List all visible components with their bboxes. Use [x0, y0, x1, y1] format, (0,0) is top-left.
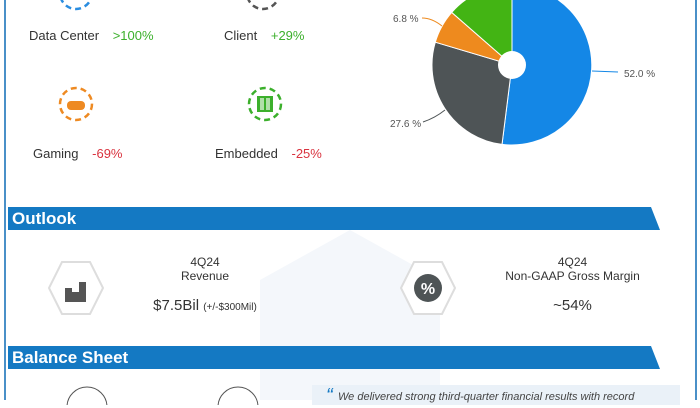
heading: outlook	[8, 207, 660, 230]
label: client: Client +29%	[224, 28, 304, 43]
text: gross margin: 4Q24	[558, 255, 587, 269]
icon: percent hexagon	[400, 261, 456, 315]
heading: balance sheet: Balance Sheet	[12, 348, 128, 367]
label: data center: Data Center >100%	[29, 28, 154, 43]
icon: data center	[60, 0, 90, 10]
heading: outlook: Outlook	[12, 209, 76, 228]
text: revenue	[153, 255, 257, 314]
label: embedded: Embedded -25%	[215, 146, 322, 161]
pie chart	[390, 0, 655, 144]
icon: embedded	[248, 86, 282, 122]
quote box	[312, 385, 680, 405]
pie chart: 27.6 %	[390, 119, 421, 130]
text: gross margin: Non-GAAP Gross Margin	[505, 269, 640, 283]
text: gross margin	[505, 255, 640, 314]
icon: percent hexagon: %	[421, 281, 435, 298]
text: gross margin: ~54%	[553, 297, 592, 314]
text: revenue: 4Q24	[190, 255, 220, 269]
pie chart: 6.8 %	[393, 14, 419, 25]
quote box: “	[326, 385, 333, 407]
label: gaming: Gaming -69%	[33, 146, 122, 161]
pie chart: 52.0 %	[624, 69, 655, 80]
text: revenue: Revenue	[181, 269, 229, 283]
heading: balance sheet	[8, 346, 660, 369]
watermark	[260, 230, 440, 400]
text: revenue: $7.5Bil (+/-$300Mil)	[153, 297, 257, 314]
icons: balance circles	[66, 386, 258, 405]
icon: gaming	[58, 86, 94, 122]
icon: coins hexagon	[48, 261, 104, 315]
icon: client	[247, 0, 277, 10]
quote box: We delivered strong third-quarter financial results with record	[338, 391, 634, 403]
